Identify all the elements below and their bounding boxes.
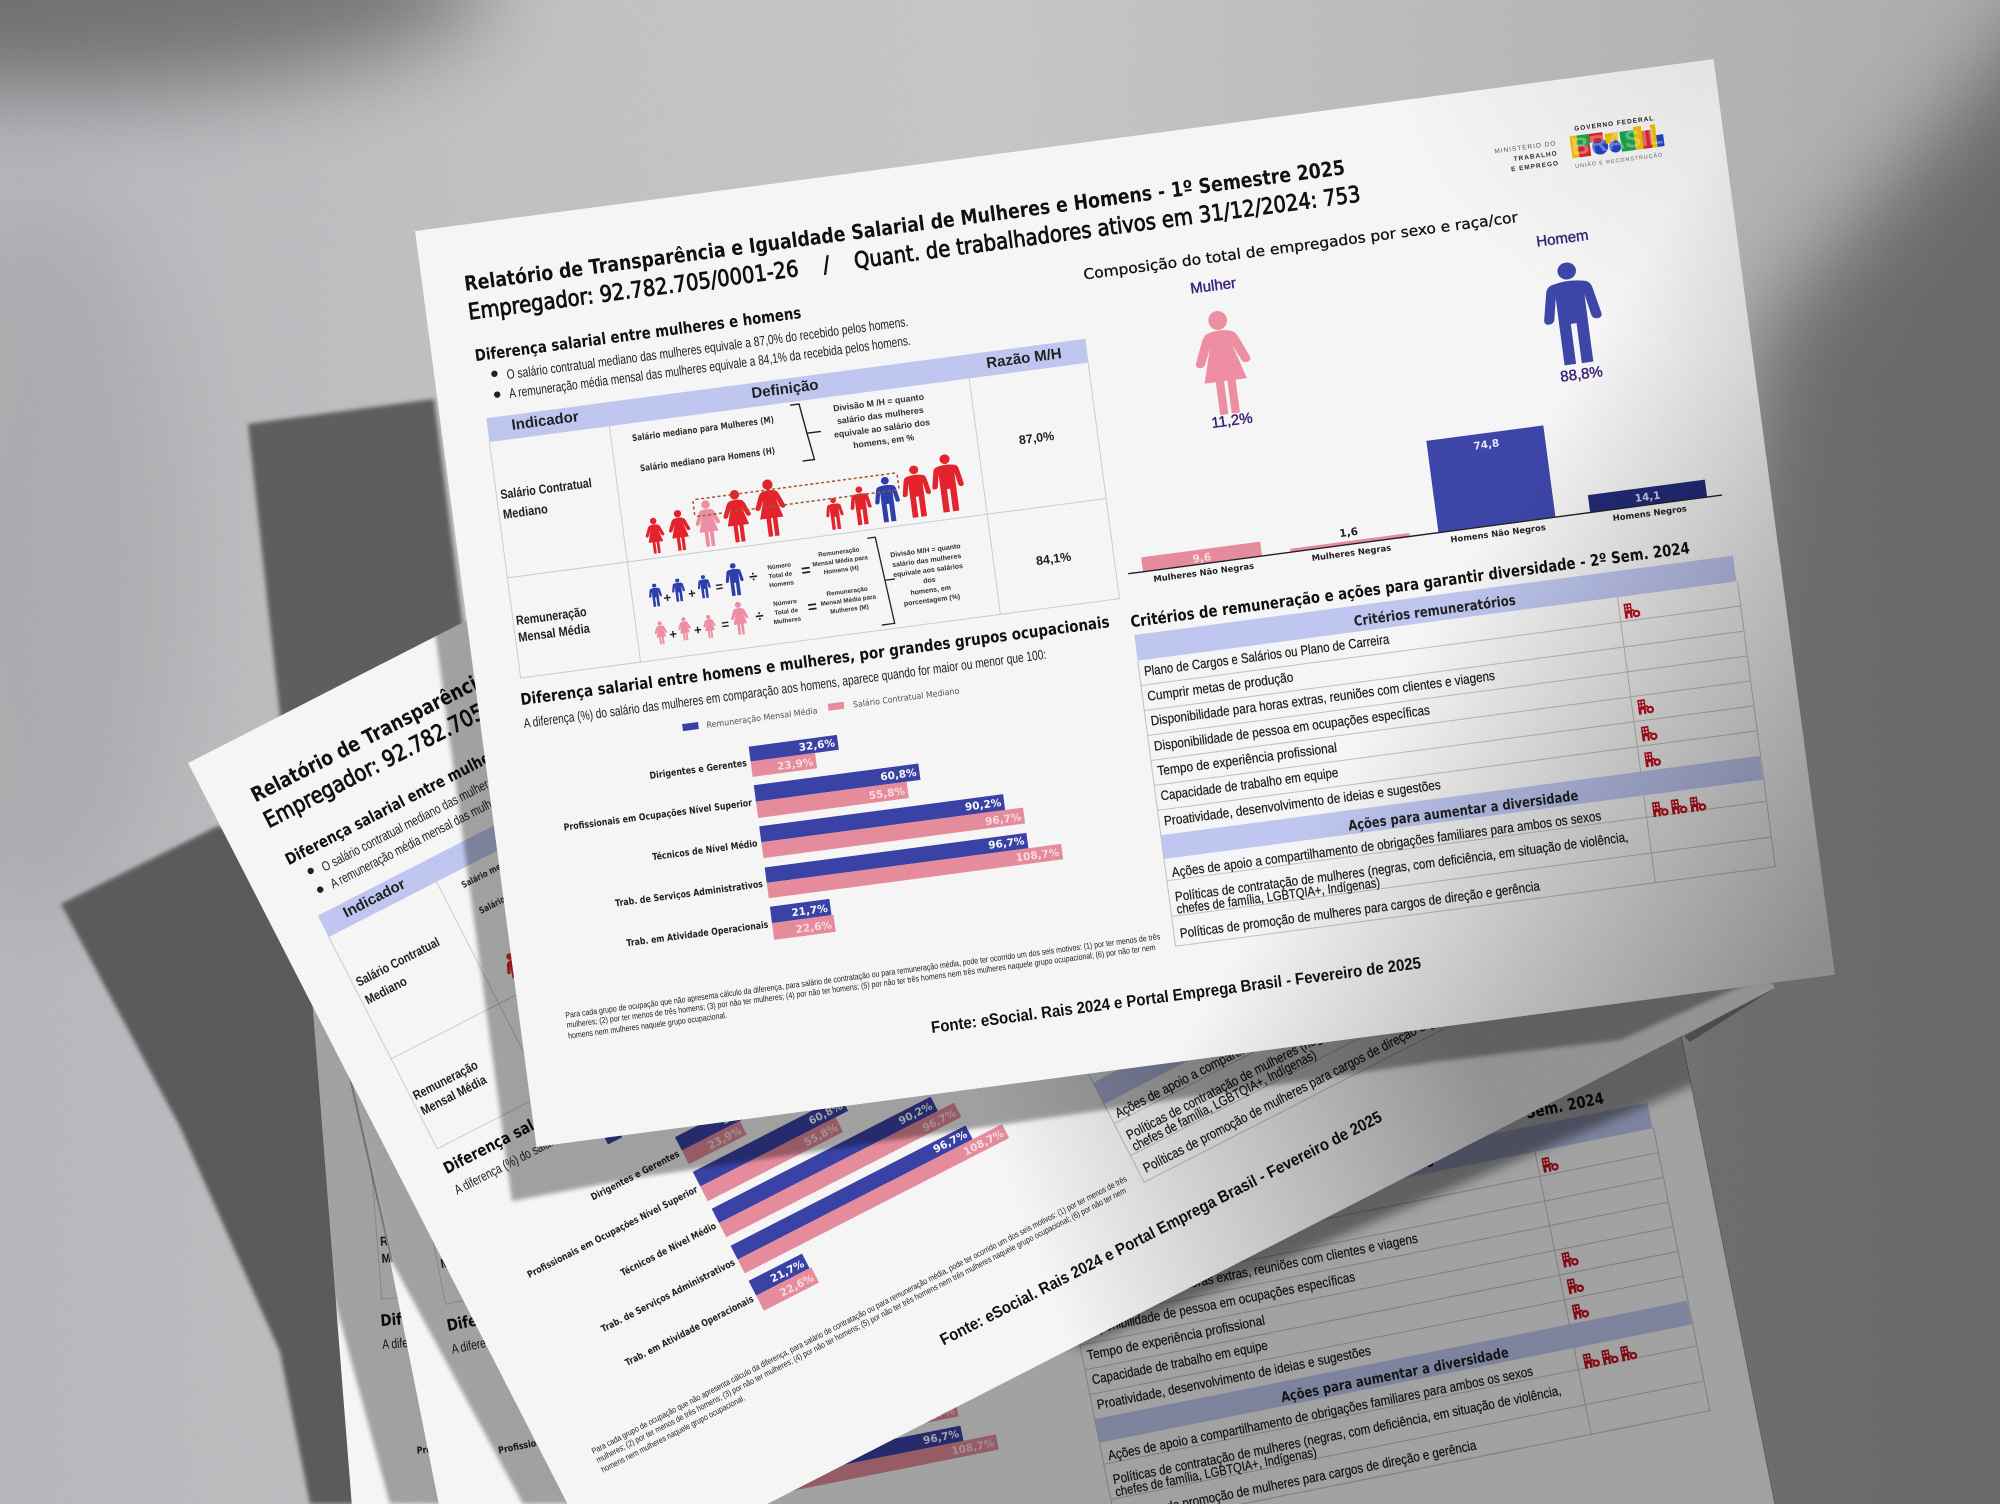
criteria table: Tempo de experiência profissional <box>1156 740 1338 779</box>
indicator table: porcentagem (%) <box>904 594 961 608</box>
indicator table: Mulheres <box>773 616 802 626</box>
ministry label: TRABALHO <box>1513 150 1558 163</box>
occupational bar chart: Técnicos de Nível Médio <box>652 838 759 863</box>
man share: 88,8% <box>1559 363 1604 386</box>
criteria heading: Critérios de remuneração e ações para garantir diversidade - 2º Sem. 2024 <box>1129 538 1691 631</box>
occupational bar chart: 96,7% <box>988 835 1026 852</box>
formula symbols: = <box>807 598 818 617</box>
criteria table: Políticas de contratação de mulheres (negras, com deficiência, em situação de violência, <box>1174 829 1629 904</box>
ground shadow: upper block <box>248 399 480 760</box>
criteria table: Proatividade, desenvolvimento de ideias e sugestões <box>1163 777 1442 829</box>
man share <box>1533 227 1610 387</box>
indicator table: Definição <box>750 376 820 402</box>
occupational bar chart: Dirigentes e Gerentes <box>649 758 748 782</box>
paper <box>415 59 1835 1147</box>
light falloff on main sheet <box>400 50 1850 1160</box>
race/sex bar chart: 9,6 <box>1192 551 1212 566</box>
indicator table: Homens <box>769 579 795 589</box>
contact shadow between sheets <box>346 1060 392 1262</box>
composition heading: Composição do total de empregados por sexo e raça/cor <box>1083 210 1519 283</box>
formula symbols: ÷ <box>748 568 759 586</box>
occupational bar chart: 32,6% <box>798 737 836 754</box>
ministry label: MINISTÉRIO DO <box>1494 138 1557 155</box>
occupational bar chart: 96,7% <box>984 811 1023 828</box>
figure row: mean men <box>646 562 746 607</box>
subheading: A diferença (%) do salário das mulheres em comparação aos homens, aparece quando for maior ou menor que 100: <box>523 647 1047 731</box>
ground shadow: lower left block <box>61 826 420 1504</box>
government logo: GOVERNO FEDERAL <box>1574 115 1655 133</box>
figure row: median <box>640 452 968 555</box>
indicator table: Remuneração <box>818 546 860 559</box>
race/sex bar chart: Mulheres Não Negras <box>1153 561 1255 584</box>
indicator table: Número <box>773 598 797 608</box>
footnote: Para cada grupo de ocupação que não apresenta cálculo da diferença, para salário de contratação ou para remuneração média, pode ter ocorrido um dos seis motivos: (1) por ter menos de três <box>565 931 1161 1020</box>
race/sex bar chart: 14,1 <box>1634 490 1661 505</box>
occupational bar chart: 21,7% <box>791 903 829 919</box>
ministry label: E EMPREGO <box>1511 160 1559 173</box>
government logo: UNIÃO E RECONSTRUÇÃO <box>1575 151 1664 170</box>
indicator table: equivale ao salário dos <box>833 417 931 440</box>
main sheet <box>400 40 1850 1160</box>
criteria table: Capacidade de trabalho em equipe <box>1160 765 1339 803</box>
formula symbols: + <box>687 585 697 601</box>
figure row: mean women <box>652 601 750 646</box>
indicator table: Indicador <box>511 408 580 434</box>
occupational bar chart: Trab. de Serviços Administrativos <box>614 879 764 909</box>
indicator table: Salário Contratual <box>499 475 593 502</box>
formula symbols: = <box>715 579 725 595</box>
formula symbols: = <box>800 562 812 580</box>
indicator table: Total de <box>768 570 793 580</box>
woman share <box>1185 274 1259 433</box>
occupational bar chart: 22,6% <box>795 919 833 936</box>
employer line: Empregador: 92.782.705/0001-26 / Quant. de trabalhadores ativos em 31/12/2024: 753 <box>466 182 1362 326</box>
indicator table: 87,0% <box>1018 429 1055 447</box>
indicator table: Mediano <box>502 501 549 522</box>
indicator table: Remuneração <box>515 604 587 628</box>
legend <box>682 687 960 734</box>
indicator table: homens, em <box>910 585 951 597</box>
criteria table: Disponibilidade para horas extras, reuniões com clientes e viagens <box>1150 668 1496 728</box>
legend: Remuneração Mensal Média <box>706 705 818 731</box>
sheet 2: second page <box>188 620 1775 1504</box>
race/sex bar chart: Homens Não Negros <box>1450 522 1546 545</box>
formula symbols: + <box>668 626 678 642</box>
ministry label <box>1494 138 1559 175</box>
indicator table: dos <box>923 577 936 585</box>
occupational bar chart: 108,7% <box>1015 847 1061 864</box>
indicator table: 84,1% <box>1035 550 1072 568</box>
criteria table: Políticas de promoção de mulheres para cargos de direção e gerência <box>1179 878 1541 941</box>
indicator table: Homens (H) <box>823 565 859 576</box>
heading: pay gap: Diferença salarial entre mulheres e homens <box>474 303 802 365</box>
criteria table: Ações para aumentar a diversidade <box>1347 788 1579 834</box>
sheet content <box>463 111 1783 1085</box>
indicator table: salário das mulheres <box>836 405 924 426</box>
indicator table: Total de <box>774 607 799 617</box>
occupational bar chart: 60,8% <box>880 767 918 784</box>
indicator table <box>486 339 1119 678</box>
title: Relatório de Transparência e Igualdade Salarial de Mulheres e Homens - 1º Semestre 2025 <box>463 155 1346 296</box>
man share: Homem <box>1535 227 1590 251</box>
bullets: O salário contratual mediano das mulheres equivale a 87,0% do recebido pelos homens. <box>506 314 909 382</box>
occupational bar chart: Profissionais em Ocupações Nível Superior <box>563 798 753 834</box>
indicator table: Salário mediano para Homens (H) <box>640 447 776 474</box>
sheet 4: bottom page <box>312 1006 438 1504</box>
indicator table: Remuneração <box>826 586 868 598</box>
indicator table: Mensal Média para <box>820 594 877 608</box>
criteria table: Ações de apoio a compartilhamento de obrigações familiares para ambos os sexos <box>1171 808 1602 880</box>
indicator table: Mensal Média <box>517 620 591 645</box>
formula symbols: = <box>721 616 730 632</box>
indicator table: Divisão M /H = quanto <box>833 392 925 414</box>
indicator table: Número <box>767 561 792 572</box>
race/sex bar chart <box>1116 403 1724 587</box>
indicator table: salário das mulheres <box>892 553 962 569</box>
government logo: BRASIL <box>1570 122 1665 161</box>
sheet 3: third page <box>356 1036 1775 1504</box>
legend: Salário Contratual Mediano <box>852 687 960 710</box>
red building icons <box>1623 597 1707 818</box>
indicator table: Mulheres (M) <box>830 604 869 616</box>
bullets: A remuneração média mensal das mulheres equivale a 84,1% da recebida pelos homens. <box>508 333 912 401</box>
criteria table: Critérios remuneratórios <box>1353 593 1517 630</box>
criteria table: chefes de família, LGBTQIA+, Indígenas) <box>1176 875 1381 917</box>
formula symbols: + <box>663 590 672 605</box>
formula symbols: + <box>693 622 703 638</box>
race/sex bar chart: 74,8 <box>1473 437 1500 453</box>
woman share: Mulher <box>1189 275 1237 298</box>
indicator table: Mensal Média para <box>812 554 869 569</box>
occupational bar chart: Trab. em Atividade Operacionais <box>626 920 769 949</box>
indicator table: Salário mediano para Mulheres (M) <box>632 416 775 444</box>
race/sex bar chart: 1,6 <box>1339 526 1359 540</box>
indicator table: equivale aos salários <box>893 563 964 579</box>
indicator table: homens, em % <box>853 432 915 450</box>
thin shadow at right corner of second page <box>1684 988 1775 1042</box>
criteria table: Plano de Cargos e Salários ou Plano de Carreira <box>1143 632 1390 679</box>
race/sex bar chart: Homens Negros <box>1612 503 1687 523</box>
heading: occupational groups: Diferença salarial entre homens e mulheres, por grandes grupos ocupacionais <box>519 612 1111 709</box>
occupational bar chart: 55,8% <box>868 785 906 802</box>
formula symbols: ÷ <box>754 608 765 626</box>
woman share: 11,2% <box>1210 410 1254 432</box>
indicator table: Razão M/H <box>985 345 1063 372</box>
race/sex bar chart: Mulheres Negras <box>1311 543 1392 563</box>
criteria table <box>1134 555 1775 946</box>
formula symbols <box>661 561 819 642</box>
footnote: mulheres; (2) por ter menos de três homens; (3) por não ter mulheres; (4) por não ter homens; (5) por não ter três homens nem três mulheres naquele grupo ocupacional; (6) por não ter nem <box>566 942 1156 1030</box>
footnote: homens nem mulheres naquele grupo ocupacional. <box>567 1010 727 1041</box>
source: Fonte: eSocial. Rais 2024 e Portal Emprega Brasil - Fevereiro de 2025 <box>930 954 1422 1037</box>
indicator table: Divisão M/H = quanto <box>890 543 961 559</box>
occupational bar chart: 90,2% <box>964 797 1002 814</box>
occupational bar chart <box>556 708 1069 965</box>
criteria table: Disponibilidade de pessoa em ocupações específicas <box>1153 702 1431 754</box>
criteria table: Cumprir metas de produção <box>1146 670 1294 704</box>
occupational bar chart: 23,9% <box>776 756 815 773</box>
government logo <box>1568 114 1666 170</box>
